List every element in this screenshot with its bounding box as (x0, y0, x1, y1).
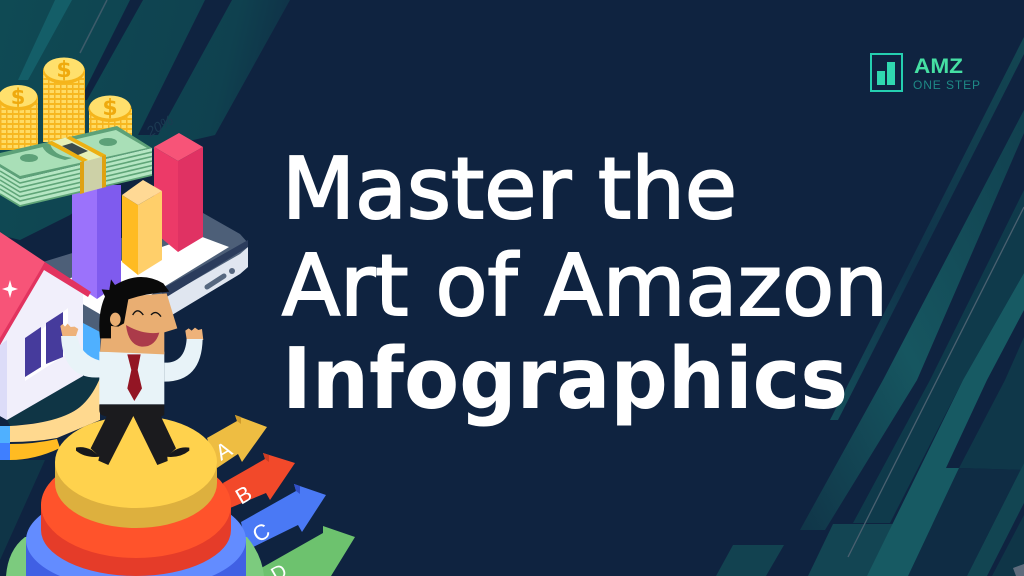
phone camera (229, 268, 235, 274)
curved ring under house (0, 378, 100, 460)
phone body (43, 213, 248, 358)
yellow tier (55, 416, 217, 528)
arrow A (207, 415, 267, 468)
bill band (49, 137, 105, 162)
tiered platform (6, 416, 264, 576)
title line 3: Infographics (282, 330, 848, 429)
logo tagline: ONE STEP (913, 78, 980, 92)
green tier (6, 537, 264, 576)
arrow D (247, 526, 355, 576)
red tier (41, 452, 231, 576)
icon: banknote stack (0, 126, 152, 206)
ear (110, 313, 121, 326)
icon: coin stacks (0, 58, 132, 150)
logo icon frame (871, 54, 902, 91)
yellow bar (122, 180, 162, 275)
mouth (126, 325, 159, 347)
illustration: phone with bars (43, 133, 248, 378)
middle coin stack: $ (56, 58, 72, 83)
background streaks: right (716, 37, 1024, 576)
title line 2: Art of Amazon (282, 237, 888, 336)
logo bars (877, 62, 895, 85)
phone screen (50, 235, 229, 320)
logo wordmark: AMZ (914, 55, 963, 78)
shoes (76, 447, 189, 457)
background streaks: top left (0, 0, 290, 560)
bill top face (0, 126, 152, 179)
title line 1: Master the (282, 140, 737, 239)
tie (127, 354, 142, 401)
icon: sparkle (2, 280, 18, 298)
house window (25, 308, 68, 381)
arrow B: B (231, 480, 256, 509)
arrow A: A (211, 436, 236, 465)
title (282, 140, 888, 429)
arms (61, 336, 203, 382)
left coin stack: $ (11, 85, 25, 109)
arrow C: C (248, 518, 274, 547)
purple bar (72, 185, 121, 299)
phone blue side (83, 323, 100, 378)
eyes (133, 311, 161, 317)
hair (99, 277, 169, 338)
arrow B (223, 453, 295, 509)
trousers (91, 404, 176, 465)
right coin stack: $ (102, 96, 118, 121)
faint 20 percent label: 20% (143, 112, 176, 140)
house roof (0, 232, 45, 345)
phone speaker (207, 276, 224, 287)
blue tier (26, 490, 246, 576)
red bar (154, 133, 203, 252)
character: businessman (60, 277, 203, 465)
right hand (185, 328, 203, 340)
left hand (60, 324, 78, 337)
logo (871, 54, 980, 92)
arrow C (241, 484, 326, 550)
illustration: house (0, 232, 91, 420)
neck and face (100, 293, 177, 354)
house walls (0, 268, 83, 420)
arrows (207, 415, 355, 576)
shirt (99, 352, 164, 404)
bill stack sides (0, 148, 152, 206)
